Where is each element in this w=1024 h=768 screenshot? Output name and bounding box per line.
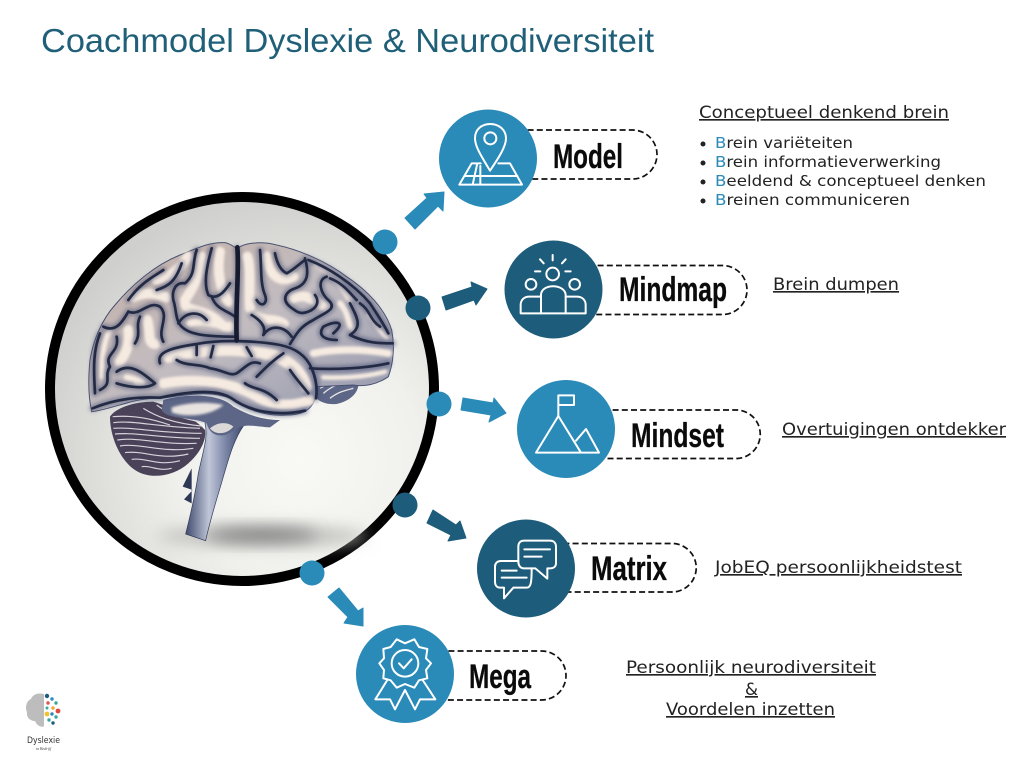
lower frontal fold bbox=[315, 377, 359, 404]
brain stem bbox=[186, 419, 244, 541]
label pill bbox=[430, 651, 566, 700]
icon: award rosette bbox=[375, 639, 435, 709]
bullet list bbox=[700, 134, 986, 209]
label text: Mindmap bbox=[619, 271, 727, 309]
icon: group of people bbox=[521, 255, 586, 313]
nerve bits bbox=[183, 468, 193, 503]
arrow: to Matrix bbox=[427, 510, 466, 541]
label text: Mindset bbox=[631, 417, 724, 455]
connector dot 5 bbox=[300, 560, 324, 586]
title: Coachmodel Dyslexie & Neurodiversiteit bbox=[41, 22, 654, 59]
pons bbox=[162, 396, 280, 435]
label pill bbox=[585, 410, 760, 458]
brain bbox=[89, 243, 393, 541]
text: neurodiversiteit inzetten bbox=[626, 658, 877, 719]
panel: Model bbox=[439, 110, 657, 208]
icon: speech bubbles bbox=[495, 541, 556, 598]
bullet list: Beeldend & conceptueel denken bbox=[715, 172, 986, 190]
label pill bbox=[545, 544, 696, 592]
label pill bbox=[500, 130, 657, 179]
icon circle bbox=[439, 110, 537, 208]
icon circle bbox=[477, 520, 575, 618]
panel: Matrix bbox=[477, 520, 696, 618]
arrow: to Mindset bbox=[461, 398, 506, 422]
text: neurodiversiteit inzetten: Persoonlijk neurodiversiteit bbox=[626, 658, 877, 677]
logo wordmark: Dyslexie bbox=[27, 736, 60, 746]
logo brain, coloured dots bbox=[45, 694, 60, 725]
label text: Model bbox=[553, 138, 623, 176]
icon: map pin bbox=[459, 124, 522, 185]
panel: Mindmap bbox=[504, 240, 747, 338]
panel: Mindset bbox=[517, 380, 760, 478]
bullet list: Brein informatieverwerking bbox=[715, 153, 941, 171]
sulci soft shading bbox=[93, 248, 393, 413]
icon circle bbox=[504, 240, 602, 338]
gyri highlights bbox=[102, 252, 388, 405]
central fissure bbox=[236, 247, 238, 340]
logo brain, grey half bbox=[26, 693, 44, 727]
text: neurodiversiteit inzetten: & bbox=[745, 680, 758, 699]
icon: mountain with flag bbox=[536, 395, 599, 453]
label text: Mega bbox=[469, 658, 532, 696]
icon circle bbox=[356, 625, 454, 723]
icon circle bbox=[517, 380, 615, 478]
connector dot 3 bbox=[426, 392, 452, 416]
text: Brein dumpen: Brein dumpen bbox=[773, 275, 899, 294]
connector dot 1 bbox=[372, 230, 398, 254]
label text: Matrix bbox=[591, 550, 667, 588]
sulci dark lines bbox=[93, 248, 393, 413]
brain illustration in black circle bbox=[50, 197, 434, 581]
arrow: to Mega bbox=[328, 588, 363, 626]
logo subline: in Bedrijf bbox=[36, 746, 52, 751]
logo: Dyslexie in Bedrijf bbox=[26, 693, 60, 751]
text: JobEQ persoonlijkheidstest: JobEQ persoonlijkheidstest bbox=[714, 558, 963, 577]
floor shadow bbox=[157, 526, 367, 546]
text block: conceptueel denkend brein bbox=[699, 103, 986, 209]
heading: Conceptueel denkend brein bbox=[699, 103, 949, 122]
bullet list: Breinen communiceren bbox=[715, 191, 910, 209]
connector dot 4 bbox=[392, 492, 418, 518]
black ring with grey backdrop bbox=[50, 197, 434, 581]
panel: Mega bbox=[356, 625, 566, 723]
text: Overtuigingen ontdekker: Overtuigingen ontdekker bbox=[782, 420, 1006, 439]
bullet list: Brein variëteiten bbox=[715, 134, 853, 152]
arrow: to Mindmap bbox=[442, 282, 487, 310]
cerebrum base bbox=[89, 243, 393, 415]
arrow: to Model bbox=[405, 192, 444, 229]
text: neurodiversiteit inzetten: Voordelen inzetten bbox=[666, 700, 835, 719]
label pill bbox=[570, 266, 747, 314]
connector dot 2 bbox=[406, 296, 430, 320]
cerebellum bbox=[110, 402, 205, 476]
